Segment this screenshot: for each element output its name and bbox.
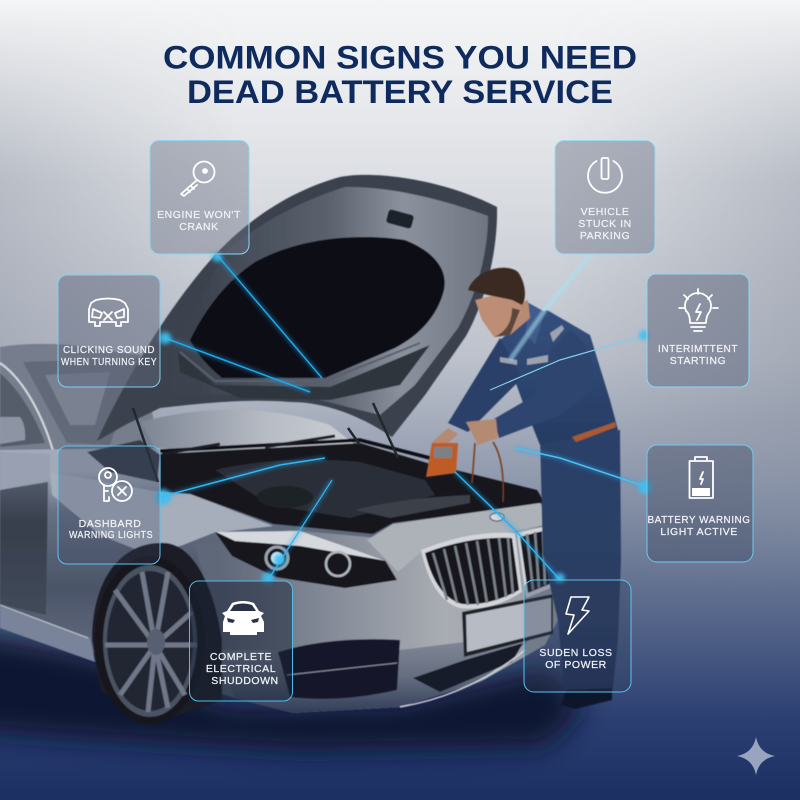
card: complete electrical shutdown: ELECTRICAL	[206, 663, 276, 675]
torso	[500, 310, 618, 445]
icon: power button	[588, 158, 622, 193]
card: intermittent starting: STARTING	[670, 355, 726, 367]
hood inner liner	[190, 237, 445, 378]
engine bay	[160, 436, 545, 534]
beard	[494, 308, 520, 337]
badge	[490, 513, 504, 521]
collar	[526, 302, 545, 344]
icon: light bulb	[679, 289, 718, 331]
card: battery warning light active	[647, 445, 753, 562]
card: complete electrical shutdown: SHUDDOWN	[211, 675, 279, 687]
hood front lip	[367, 503, 557, 572]
wheel arch	[92, 543, 222, 725]
card: clicking sound: WHEN TURNING KEY	[61, 356, 157, 368]
card: dashboard warning lights: WARNING LIGHTS	[69, 529, 153, 541]
card: sudden loss of power	[524, 580, 631, 692]
neck	[510, 300, 530, 335]
card: dashboard warning lights	[58, 446, 160, 564]
license plate	[462, 594, 553, 657]
card: intermittent starting: INTERIMTTENT	[658, 343, 738, 355]
rocker panel	[0, 606, 95, 662]
card: dashboard warning lights: DASHBARD	[79, 518, 141, 530]
ground shadow	[0, 615, 585, 752]
lower air intake	[278, 639, 525, 707]
front wheel	[95, 556, 205, 724]
icon: key with x	[99, 468, 132, 501]
card: sudden loss of power: SUDEN LOSS	[539, 647, 613, 659]
card: engine won't crank: CRANK	[179, 221, 219, 233]
car	[0, 344, 570, 725]
front fender and bumper	[195, 525, 570, 713]
belt	[572, 422, 616, 442]
card: complete electrical shutdown: COMPLETE	[210, 651, 272, 663]
hood inner frame	[170, 187, 488, 415]
card: clicking sound: CLICKING SOUND	[63, 344, 155, 356]
hands	[432, 419, 498, 448]
liner lower frame	[178, 345, 430, 400]
hood struts	[133, 403, 398, 482]
line glow	[160, 255, 647, 580]
lower bumper	[215, 640, 530, 713]
technician	[426, 268, 621, 709]
card: sudden loss of power: OF POWER	[545, 659, 607, 671]
icon: battery	[690, 457, 713, 498]
car body	[0, 448, 570, 713]
card: battery warning light active: BATTERY WARNING	[648, 514, 750, 526]
face	[475, 290, 522, 337]
card: vehicle stuck in parking: PARKING	[580, 230, 630, 242]
card: vehicle stuck in parking: STUCK IN	[578, 218, 632, 230]
card: clicking sound	[58, 275, 160, 387]
door top highlight	[0, 452, 50, 490]
reflective strips	[500, 325, 564, 365]
reaching arm left	[448, 338, 522, 432]
card: vehicle stuck in parking	[555, 140, 655, 254]
open hood	[97, 175, 497, 441]
icon: lightning bolt	[566, 597, 589, 634]
dark area near hood hinge	[87, 440, 160, 482]
title: DEAD BATTERY SERVICE	[187, 74, 613, 110]
title: COMMON SIGNS YOU NEED	[163, 40, 637, 76]
icon: sparkle	[737, 737, 775, 775]
test cables	[472, 442, 503, 502]
shoes	[561, 688, 612, 709]
icon: damaged car	[89, 298, 128, 326]
grille	[421, 524, 564, 609]
reaching arm right	[494, 330, 593, 438]
fender top surface	[50, 472, 273, 555]
connector lines	[155, 252, 652, 584]
legs	[540, 430, 621, 695]
card: intermittent starting	[647, 274, 749, 387]
card: engine won't crank: ENGINE WON'T	[157, 209, 241, 221]
card: battery warning light active: LIGHT ACTIVE	[660, 526, 738, 538]
card: vehicle stuck in parking: VEHICLE	[581, 206, 629, 218]
card: complete electrical shutdown	[190, 581, 292, 701]
hair	[468, 268, 525, 305]
multimeter	[426, 443, 458, 477]
icon: car	[222, 601, 264, 635]
side door	[0, 482, 48, 615]
card: engine won't crank	[150, 140, 249, 254]
title	[163, 40, 637, 110]
car cabin and windows	[0, 344, 358, 458]
headlight	[215, 531, 397, 588]
icon: key	[181, 162, 214, 196]
